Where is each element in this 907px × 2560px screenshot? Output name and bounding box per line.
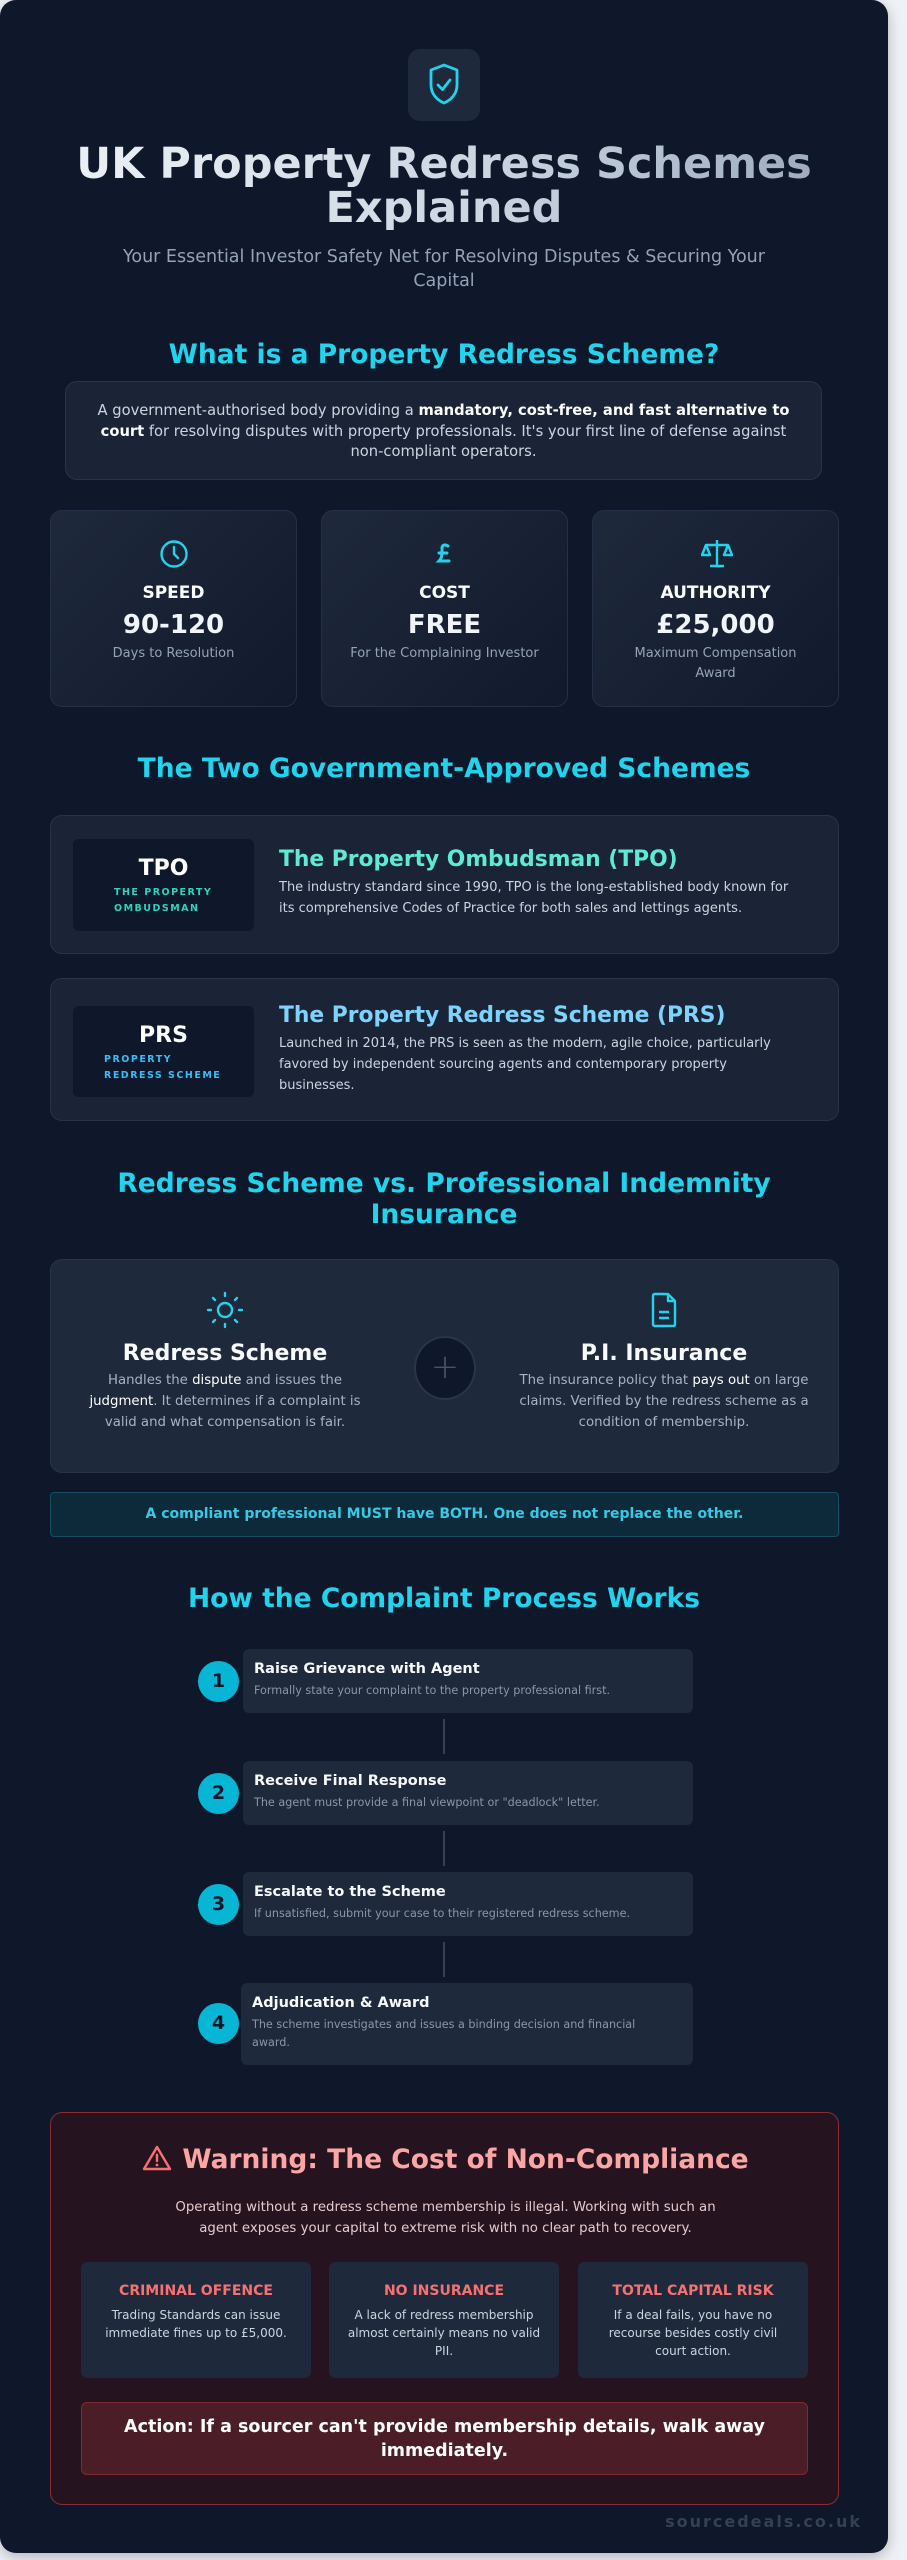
PRS logo: PRS [139, 1023, 188, 1048]
step 1: Formally state your complaint to the property professional first. [254, 1684, 610, 1697]
heading: two schemes: The Two Government-Approved Schemes [138, 753, 750, 784]
TPO text: The industry standard since 1990, TPO is the long-established body known for [279, 880, 788, 895]
warning text: Operating without a redress scheme membership is illegal. Working with such an [175, 2200, 716, 2215]
warning card: criminal offence: CRIMINAL OFFENCE [119, 2283, 273, 2299]
warning card: criminal offence: Trading Standards can issue [112, 2308, 280, 2322]
stat card: authority: Maximum Compensation [634, 646, 796, 661]
icon: shield [408, 49, 480, 121]
step 4: Adjudication & Award [252, 1995, 429, 2011]
TPO text: its comprehensive Codes of Practice for both sales and lettings agents. [279, 901, 742, 916]
heading: process: How the Complaint Process Works [188, 1583, 700, 1614]
process steps [198, 1649, 693, 2065]
step 2 [198, 1761, 693, 1825]
icon: sun [206, 1292, 244, 1328]
action callout [81, 2402, 808, 2475]
heading: redress vs PI: Insurance [371, 1199, 517, 1230]
definition box [65, 381, 822, 480]
definition box: non-compliant operators. [350, 443, 536, 460]
stat card: authority: AUTHORITY [660, 583, 771, 603]
step 3: 3 [212, 1893, 225, 1915]
step 3: Escalate to the Scheme [254, 1884, 446, 1900]
column: PI insurance: claims. Verified by the redress scheme as a [519, 1394, 809, 1409]
icon: plus circle [414, 1336, 476, 1400]
footer brand: sourcedeals.co.uk [665, 2512, 862, 2531]
step 4: 4 [212, 2012, 225, 2034]
step 3: If unsatisfied, submit your case to their registered redress scheme. [254, 1907, 630, 1920]
warning title: Warning: The Cost of Non-Compliance [182, 2144, 749, 2175]
PRS logo: REDRESS SCHEME [104, 1070, 221, 1081]
heading: what is: What is a Property Redress Scheme? [169, 339, 719, 370]
stat card: speed: Days to Resolution [113, 646, 234, 661]
icon: clock [160, 540, 188, 568]
PRS text [279, 1003, 771, 1093]
stat card: authority [592, 510, 839, 707]
icon: plus circle: + [431, 1347, 459, 1387]
stat card: speed [50, 510, 297, 707]
warning card: criminal offence [81, 2262, 311, 2378]
step 2: Receive Final Response [254, 1773, 446, 1789]
step 3 [198, 1872, 693, 1936]
stat card: cost: For the Complaining Investor [350, 646, 539, 661]
panel: comparison [50, 1259, 839, 1473]
heading: redress vs PI: Redress Scheme vs. Professional Indemnity [117, 1168, 771, 1199]
title [0, 142, 888, 230]
icon: scales [701, 540, 733, 568]
column: redress scheme: judgment. It determines if a complaint is [89, 1394, 361, 1409]
warning card: no insurance: A lack of redress membership [354, 2308, 534, 2322]
stat card: authority: Award [695, 666, 736, 681]
step 2: The agent must provide a final viewpoint or "deadlock" letter. [254, 1796, 600, 1809]
icon: document [652, 1292, 676, 1328]
TPO logo: THE PROPERTY [114, 887, 212, 898]
warning text: agent exposes your capital to extreme risk with no clear path to recovery. [199, 2221, 692, 2236]
warning card: no insurance [329, 2262, 559, 2378]
stat card: cost: COST [419, 583, 470, 603]
stat card: cost [321, 510, 568, 707]
panel: PRS [50, 978, 839, 1121]
column: redress scheme: Handles the dispute and issues the [108, 1373, 342, 1388]
step 1: 1 [212, 1670, 225, 1692]
warning card: no insurance: NO INSURANCE [384, 2283, 504, 2299]
action callout: Action: If a sourcer can't provide membership details, walk away [124, 2417, 765, 2437]
stat card: authority: £25,000 [656, 610, 775, 640]
PRS text: favored by independent sourcing agents and contemporary property [279, 1057, 727, 1072]
column: redress scheme: valid and what compensation is fair. [105, 1415, 345, 1430]
title: UK Property Redress Schemes [76, 139, 812, 189]
PRS logo [73, 1006, 254, 1097]
TPO text: The Property Ombudsman (TPO) [279, 847, 678, 872]
warning card: no insurance: almost certainly means no valid [348, 2326, 540, 2340]
warning card: total capital risk: TOTAL CAPITAL RISK [612, 2283, 774, 2299]
TPO text [278, 847, 788, 916]
warning card: total capital risk [578, 2262, 808, 2378]
PRS text: Launched in 2014, the PRS is seen as the modern, agile choice, particularly [279, 1036, 771, 1051]
icon: warning triangle [142, 2146, 172, 2170]
subtitle [123, 247, 765, 291]
stat card: speed: SPEED [142, 583, 205, 603]
warning card: criminal offence: immediate fines up to £5,000. [105, 2326, 287, 2340]
subtitle: Your Essential Investor Safety Net for Resolving Disputes & Securing Your [123, 247, 765, 267]
step 4: The scheme investigates and issues a binding decision and financial [252, 2018, 635, 2031]
action callout: immediately. [381, 2441, 508, 2461]
panel: TPO [50, 815, 839, 954]
panel: warning [50, 2112, 839, 2505]
step 1 [198, 1649, 693, 1713]
warning card: total capital risk: court action. [655, 2344, 731, 2358]
column: redress scheme [89, 1292, 361, 1430]
warning card: total capital risk: If a deal fails, you have no [614, 2308, 772, 2322]
callout: must have both: A compliant professional MUST have BOTH. One does not replace the other. [146, 1506, 743, 1522]
title: Explained [326, 183, 562, 233]
TPO logo: OMBUDSMAN [114, 903, 199, 914]
step 4: award. [252, 2036, 290, 2049]
PRS logo: PROPERTY [104, 1054, 172, 1065]
TPO logo: TPO [139, 856, 188, 881]
step 4 [198, 1983, 693, 2065]
step 1: Raise Grievance with Agent [254, 1661, 480, 1677]
stat card: cost: FREE [408, 610, 481, 640]
warning text [175, 2200, 716, 2236]
warning card: total capital risk: recourse besides costly civil [609, 2326, 777, 2340]
column: redress scheme: Redress Scheme [123, 1341, 327, 1366]
column: PI insurance [519, 1292, 809, 1430]
PRS text: businesses. [279, 1078, 355, 1093]
stat card: speed: 90-120 [123, 610, 224, 640]
PRS text: The Property Redress Scheme (PRS) [279, 1003, 725, 1028]
subtitle: Capital [413, 271, 475, 291]
warning card: no insurance: PII. [435, 2344, 453, 2358]
column: PI insurance: condition of membership. [579, 1415, 749, 1430]
heading: redress vs PI [117, 1168, 771, 1230]
callout: must have both [50, 1492, 839, 1537]
step 2: 2 [212, 1782, 225, 1804]
TPO logo [73, 839, 254, 931]
definition box: A government-authorised body providing a mandatory, cost-free, and fast alternative to [98, 402, 789, 419]
column: PI insurance: P.I. Insurance [581, 1341, 747, 1366]
definition box: court for resolving disputes with property professionals. It's your first line of defense against [101, 422, 786, 440]
icon: pound [436, 543, 450, 562]
column: PI insurance: The insurance policy that pays out on large [520, 1373, 808, 1388]
